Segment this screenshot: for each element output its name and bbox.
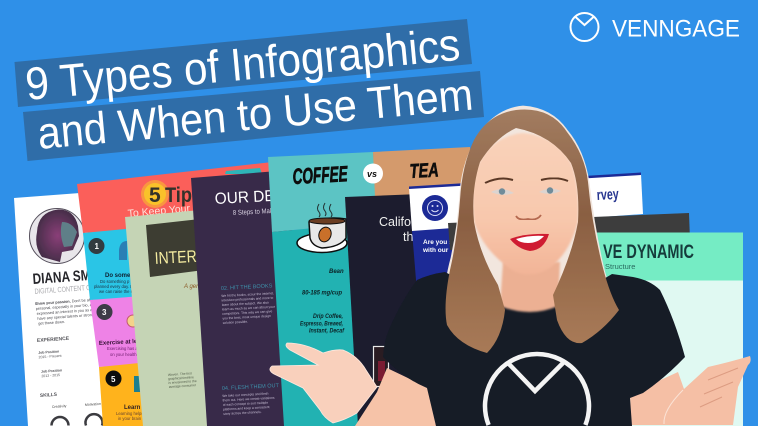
nose — [516, 215, 541, 220]
California heading — [379, 215, 432, 244]
interview note: Woven. The first — [168, 371, 192, 377]
design step 04: story across the channels. — [223, 410, 262, 416]
tip 1: planned every day. N — [94, 284, 133, 289]
tip 5: in your brain — [118, 416, 142, 421]
resume skills: Creativity — [52, 404, 67, 409]
California framed image — [374, 346, 388, 386]
t-shirt — [383, 272, 685, 426]
design step 04: 04. FLESH THEM OUT — [222, 383, 280, 392]
tips header: Tip — [165, 184, 192, 207]
tip 1: we can raise the sp — [99, 289, 136, 294]
coffee facts: Bean — [329, 269, 344, 275]
interview subtitle: A gen — [183, 284, 200, 290]
t-shirt logo — [485, 354, 589, 425]
dynamic subheading: Structure — [605, 262, 635, 271]
coffee heading: COFFEE — [292, 161, 349, 189]
resume name — [32, 267, 95, 296]
design step 04: platforms and keep a consistent — [223, 405, 270, 411]
left arm — [355, 368, 436, 426]
tip 1: Do something p — [100, 279, 130, 284]
survey question: with our — [422, 247, 449, 254]
interview note — [168, 371, 197, 389]
versus badge: vs — [367, 169, 377, 179]
design step 04 — [222, 383, 281, 416]
design title — [214, 188, 275, 217]
resume name: DIANA SM — [32, 267, 91, 288]
tip 1: Do somet — [105, 273, 132, 279]
design title: OUR DE — [214, 188, 275, 208]
resume name: DIGITAL CONTENT CR — [34, 283, 95, 296]
tip 3: 3 — [102, 308, 107, 317]
tip 5: 5 — [111, 375, 116, 384]
panel: 5 tips infographic — [77, 160, 300, 426]
tip 5: Learning helps — [116, 411, 143, 416]
tips header: 5 — [149, 184, 161, 207]
versus badge — [363, 164, 383, 184]
panel: resume infographic — [14, 184, 220, 426]
design step 02: interview professionals and more to — [221, 296, 274, 302]
left hand — [270, 343, 377, 423]
design step 02: competitors. This way we can give — [222, 309, 273, 316]
tips header: To Keep Your — [127, 203, 191, 220]
logo: Venngage: VENNGAGE — [612, 16, 740, 42]
tip 5: Learn h — [124, 405, 146, 411]
resume portrait — [30, 208, 84, 264]
tip 3: Exercising has a — [107, 346, 138, 351]
interview title box: INTER — [154, 247, 197, 268]
design step 02: 02. HIT THE BOOKS — [221, 283, 273, 292]
panel: coffee vs tea infographic — [268, 147, 470, 426]
tip 3: Exercise at lea — [99, 339, 141, 347]
resume body text: get those down. — [38, 320, 65, 326]
tip 1: 1 — [94, 242, 100, 251]
person presenter — [270, 106, 751, 426]
dynamic heading: VE DYNAMIC — [603, 241, 694, 263]
neck — [500, 262, 560, 312]
resume skills: SKILLS — [40, 392, 58, 399]
coffee facts: Instant, Decaf — [309, 328, 345, 334]
coffee facts: 80-185 mg/cup — [302, 290, 342, 296]
resume body text — [35, 298, 98, 326]
face — [473, 133, 578, 275]
panel: dark infographic — [448, 213, 690, 250]
resume experience: 2015 - Present — [38, 354, 62, 359]
design step 04: them out. Here we create variations — [222, 396, 275, 402]
resume experience: EXPERIENCE — [37, 336, 70, 344]
panel: dynamic structure infographic — [480, 232, 743, 426]
design step 02: learn about the subject. We also — [222, 301, 269, 307]
right arm and hand — [630, 356, 751, 425]
California heading: California — [379, 215, 432, 229]
survey heading: rvey — [596, 186, 620, 204]
icon: smiley — [422, 195, 448, 221]
interview note: graphical timeline — [168, 375, 194, 381]
strip: panel peeking above design process — [225, 168, 262, 174]
survey question: Are you s — [423, 239, 453, 246]
interview title box — [146, 219, 204, 277]
survey question — [422, 239, 453, 254]
design step 04: of each concept to suit multiple — [223, 401, 268, 407]
coffee facts: Drip Coffee, — [313, 313, 343, 320]
mouth — [510, 234, 549, 251]
resume experience: Job Position — [41, 368, 62, 374]
coffee facts — [300, 269, 345, 334]
design step 02: solution possible. — [223, 320, 248, 325]
design title: 8 Steps to Mak — [233, 208, 273, 217]
title band: second line: and When to Use Them — [35, 69, 475, 159]
resume skills: Motivation — [85, 402, 101, 407]
logo: Venngage — [570, 13, 740, 42]
tips header — [127, 180, 192, 220]
interview note: average consumer — [169, 383, 197, 389]
hair front right — [516, 109, 619, 343]
panel: design process infographic — [191, 170, 300, 426]
eyebrows — [485, 178, 568, 183]
icon: coffee cup — [297, 203, 347, 252]
design step 04: We take our concepts and flesh — [222, 392, 269, 398]
panel: interview infographic — [125, 210, 222, 426]
title band: first line: 9 Types of Infographics — [23, 18, 462, 110]
resume skills — [40, 392, 102, 426]
tip 3: on your health — [110, 352, 137, 357]
design step 02: you the best, most unique design — [222, 314, 271, 320]
tip 5 — [106, 370, 146, 421]
hair outline — [443, 106, 622, 346]
interview note: is envisioned to the — [168, 379, 197, 385]
design step 02: We hit the books, scour the internet, — [221, 291, 274, 298]
hair front left — [446, 110, 516, 353]
tea heading: TEA — [409, 160, 439, 183]
eyes — [491, 187, 561, 195]
resume body text: expressed an interest in you as a — [36, 308, 93, 316]
resume experience: 2013 - 2015 — [41, 373, 60, 378]
tip 3 — [96, 304, 141, 357]
resume experience: Job Position — [38, 349, 59, 355]
California heading: the — [403, 230, 420, 244]
design step 02: learn as much as we can about your — [222, 305, 276, 311]
panel: California infographic — [345, 192, 470, 426]
resume body text: personal, especially in your bio, a — [36, 303, 93, 311]
coffee facts: Espresso, Brewed, — [300, 320, 343, 328]
resume body text: Show your passion. Don't be afraid — [35, 298, 96, 306]
resume experience — [37, 336, 72, 378]
design step 02 — [221, 283, 277, 325]
panel: survey infographic — [409, 172, 643, 426]
tip 1 — [88, 238, 136, 294]
resume body text: have any special talents or strong — [37, 313, 94, 321]
